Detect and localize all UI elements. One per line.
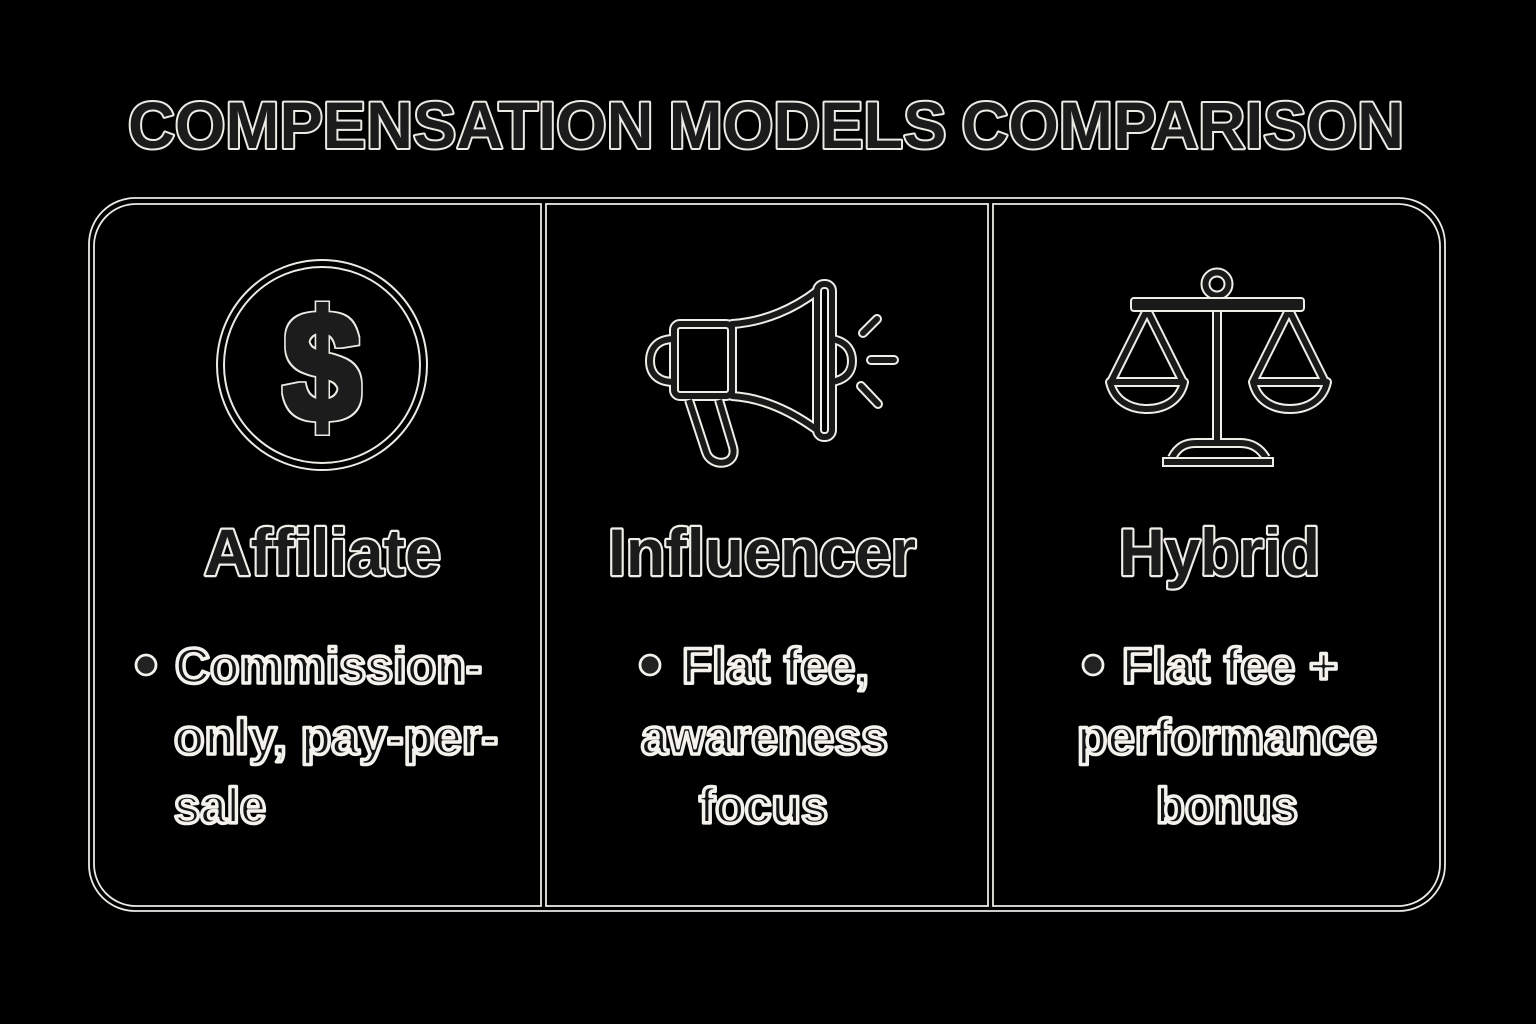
icon: dollar coin: $ bbox=[283, 281, 361, 454]
text block: hybrid description bbox=[1077, 638, 1377, 834]
text block: affiliate description bbox=[174, 638, 498, 834]
text block: influencer description bbox=[641, 638, 888, 834]
text block: hybrid description: performance bbox=[1077, 709, 1377, 765]
title: COMPENSATION MODELS COMPARISON bbox=[128, 88, 1404, 162]
icon: dollar coin bbox=[217, 260, 427, 470]
text block: hybrid description: bonus bbox=[1156, 778, 1298, 834]
text block: influencer description: Flat fee, bbox=[682, 638, 869, 694]
icon: balance scale bbox=[1110, 272, 1327, 466]
text block: affiliate description: only, pay-per- bbox=[174, 709, 498, 765]
icon: megaphone bbox=[650, 284, 894, 463]
bullet bbox=[640, 655, 660, 675]
text block: influencer description: focus bbox=[699, 778, 828, 834]
comparison table frame bbox=[89, 198, 1445, 911]
text block: hybrid description: Flat fee + bbox=[1122, 638, 1338, 694]
panel: influencer bbox=[608, 284, 916, 834]
text block: influencer description: awareness bbox=[641, 709, 888, 765]
panel: affiliate bbox=[136, 260, 498, 834]
text block: affiliate description: sale bbox=[174, 778, 266, 834]
panel: hybrid bbox=[1077, 272, 1377, 834]
heading: hybrid: Hybrid bbox=[1119, 515, 1320, 589]
bullet bbox=[1083, 655, 1103, 675]
text block: affiliate description: Commission- bbox=[175, 638, 482, 694]
bullet bbox=[136, 655, 156, 675]
heading: influencer: Influencer bbox=[608, 515, 916, 589]
heading: affiliate: Affiliate bbox=[204, 515, 441, 589]
